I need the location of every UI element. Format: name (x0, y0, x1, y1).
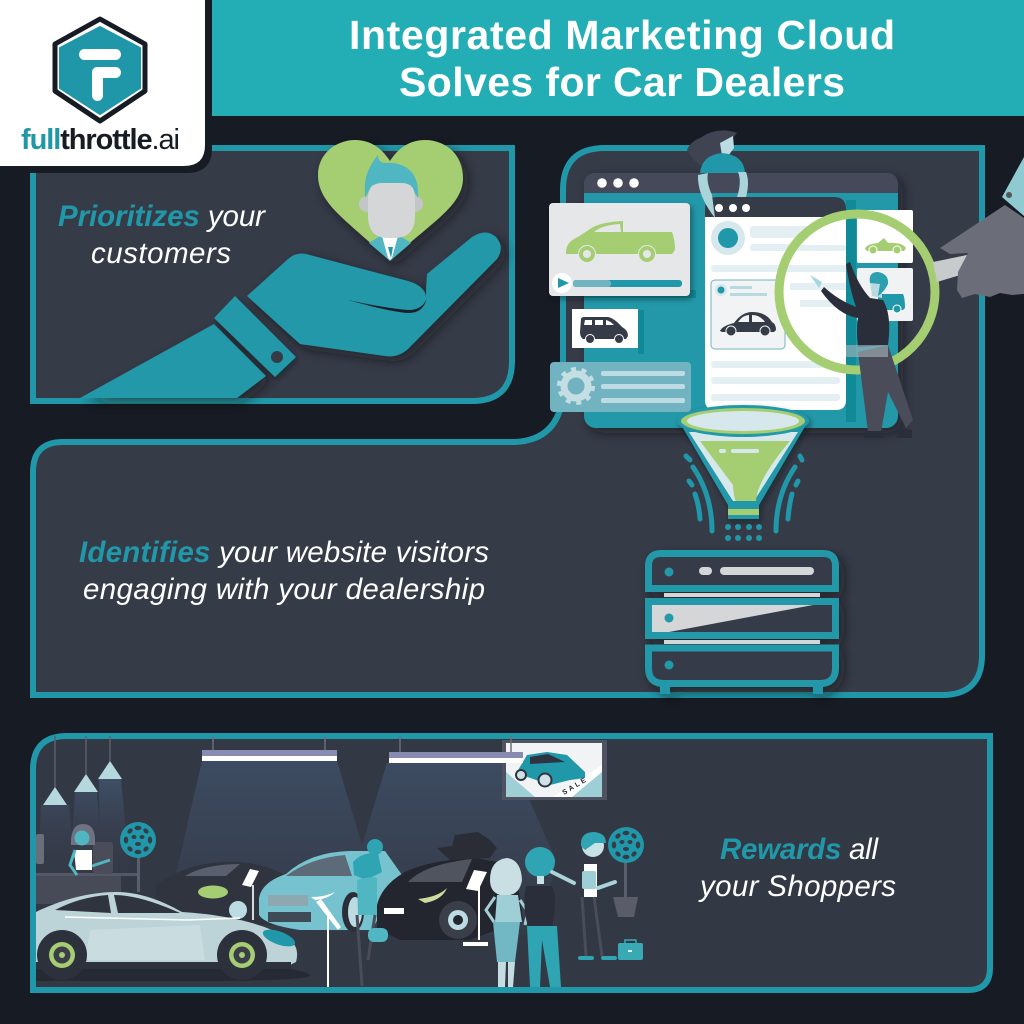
panel: rewards shoppers (33, 736, 990, 990)
black suv with bow (377, 832, 523, 940)
illustration: website dashboard (549, 130, 1024, 438)
panel: rewards shoppers: your Shoppers (698, 870, 896, 903)
panel: identifies visitors (33, 148, 982, 695)
title banner: Solves for Car Dealers (399, 59, 845, 105)
wall picture of car (502, 740, 607, 800)
settings card (550, 362, 691, 412)
gloved hand with magnifier handle (933, 157, 1024, 298)
price sign 1 (242, 869, 259, 920)
pendant lamps (43, 736, 122, 805)
video card with pickup (549, 203, 690, 296)
side cards (857, 210, 913, 321)
price sign 2 (316, 899, 341, 987)
icon: server stack (648, 554, 836, 694)
icon: funnel (677, 405, 809, 541)
icon: hand (80, 232, 501, 398)
title banner (212, 0, 1024, 116)
topiary tree left (120, 822, 156, 892)
person pointing (810, 262, 913, 438)
dark coupe (155, 862, 285, 925)
caption: rewards: Rewards all (720, 833, 879, 866)
caption: identifies: Identifies your website visitors (79, 536, 489, 569)
salesman with tablet (580, 832, 615, 958)
briefcase (618, 940, 643, 960)
icon: heart with customer (318, 140, 463, 261)
panel: identifies visitors: engaging with your dealership (83, 573, 485, 606)
motion lines (686, 456, 802, 531)
output dots (725, 524, 762, 541)
woman peeking over window (687, 130, 748, 218)
panel: prioritizes customers: customers (91, 237, 231, 270)
front browser window (705, 197, 846, 410)
inner sedan card (711, 280, 785, 349)
woman with bag (353, 839, 388, 986)
logo hexagon mark (55, 19, 145, 121)
potted topiary right (608, 827, 644, 917)
illustration: showroom (36, 736, 644, 987)
silver sports car (36, 892, 310, 981)
ceiling light beams (38, 761, 556, 935)
logo wordmark: fullthrottle.ai (21, 124, 180, 156)
long ceiling lights (202, 736, 523, 763)
title: Integrated Marketing Cloud (349, 12, 895, 58)
panel: prioritizes customers (33, 140, 512, 401)
price sign 3 (463, 870, 488, 946)
caption: prioritizes: Prioritizes your (58, 200, 266, 233)
logo panel (0, 0, 212, 173)
woman back view (486, 858, 528, 987)
back browser window (584, 173, 898, 428)
van card (572, 309, 638, 348)
magnified lens (775, 214, 935, 370)
receptionist at desk (36, 824, 137, 904)
sale text: SALE (561, 776, 590, 797)
man back view with magnifier (524, 847, 574, 987)
blue sedan (259, 851, 402, 932)
